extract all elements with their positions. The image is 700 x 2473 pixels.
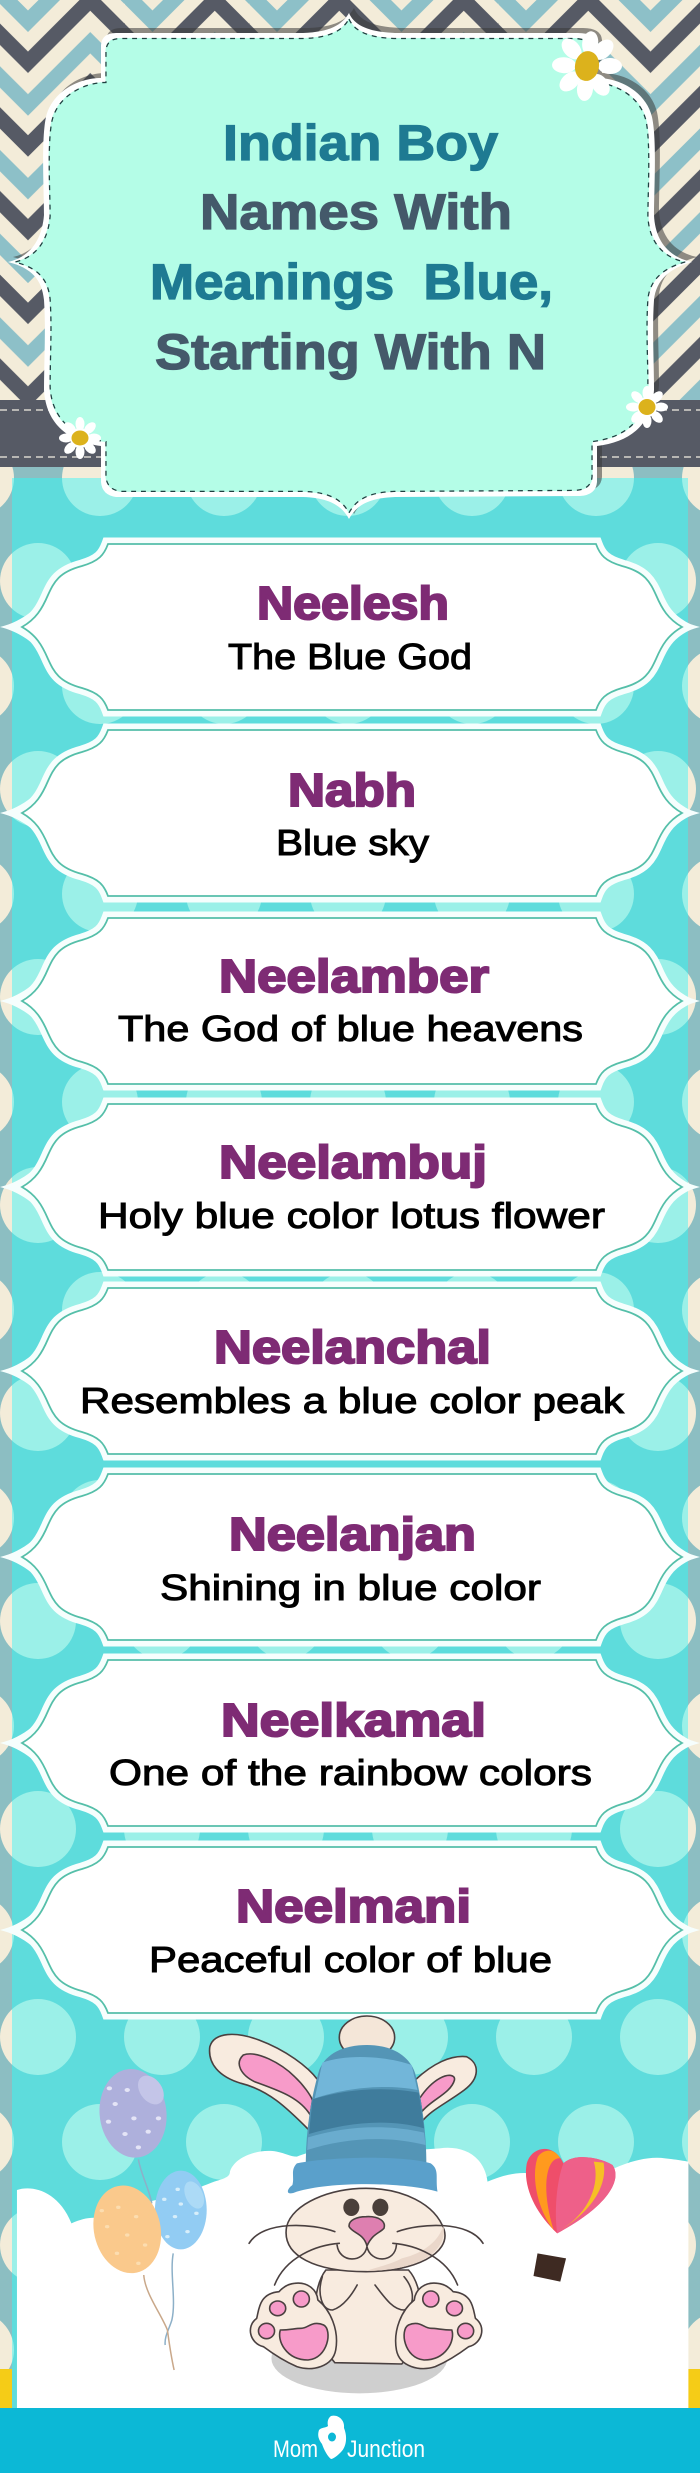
card: Neelkamal: One of the rainbow colors	[109, 1752, 592, 1793]
nose	[349, 2217, 384, 2246]
right foot	[396, 2283, 482, 2369]
purple balloon	[96, 2068, 170, 2159]
logo icon	[318, 2416, 346, 2459]
balloon strings	[138, 2159, 174, 2370]
eyes	[343, 2199, 388, 2216]
heart air balloon	[526, 2149, 615, 2282]
title: Meanings Blue,	[150, 254, 553, 310]
card: Neelkamal	[0, 1660, 700, 1826]
logo wordmark: Mom	[273, 2436, 318, 2463]
card: Neelanchal	[0, 1288, 700, 1454]
blue balloon	[155, 2171, 208, 2249]
card: Neelesh	[0, 544, 700, 710]
card: Neelmani: Peaceful color of blue	[149, 1939, 552, 1980]
icon: small daisy left	[59, 417, 101, 459]
title: Indian Boy	[223, 115, 498, 171]
orange balloon	[88, 2183, 167, 2276]
MomJunction logo	[273, 2416, 425, 2463]
card: Neelamber: The God of blue heavens	[118, 1008, 583, 1049]
card: Neelmani	[0, 1847, 700, 2013]
card: Neelkamal: Neelkamal	[221, 1694, 486, 1746]
card: Nabh: Blue sky	[276, 822, 429, 863]
card: Neelambuj: Neelambuj	[219, 1136, 487, 1188]
head	[286, 2188, 445, 2272]
card: Nabh	[0, 730, 700, 896]
ears	[210, 2034, 476, 2130]
card: Neelambuj: Holy blue color lotus flower	[98, 1195, 605, 1236]
bottom illustration	[17, 2016, 688, 2408]
arms	[320, 2277, 412, 2310]
bunny	[210, 2016, 483, 2393]
icon: small daisy right	[626, 386, 668, 428]
logo wordmark: Junction	[347, 2436, 425, 2463]
shadow	[271, 2323, 447, 2393]
card: Nabh: Nabh	[288, 764, 416, 816]
title: Starting With N	[155, 324, 546, 380]
card: Neelanchal: Neelanchal	[214, 1321, 491, 1373]
grey stitched ribbon	[0, 400, 700, 467]
card: Neelanchal: Resembles a blue color peak	[80, 1380, 625, 1421]
mouth and whiskers	[249, 2225, 483, 2285]
body	[315, 2270, 421, 2364]
card: Neelanjan: Neelanjan	[229, 1508, 476, 1560]
pompom	[339, 2016, 395, 2059]
card: Neelamber	[0, 918, 700, 1084]
card: Neelanjan	[0, 1474, 700, 1640]
basket	[533, 2253, 566, 2282]
footer band	[0, 2408, 700, 2473]
title	[150, 115, 553, 380]
title plaque	[8, 8, 697, 519]
balloons	[88, 2068, 208, 2370]
card: Neelambuj	[0, 1104, 700, 1270]
card: Neelesh: The Blue God	[228, 636, 472, 677]
card: Neelanjan: Shining in blue color	[160, 1567, 541, 1608]
card: Neelamber: Neelamber	[219, 950, 489, 1002]
card: Neelmani: Neelmani	[236, 1880, 471, 1932]
clouds	[17, 2146, 688, 2408]
left foot	[250, 2283, 337, 2369]
chevron header background	[0, 0, 700, 401]
icon: large daisy	[552, 30, 622, 102]
logo wordmark	[273, 2436, 425, 2463]
striped hat	[288, 2045, 438, 2193]
brim	[288, 2158, 438, 2193]
card: Neelesh: Neelesh	[257, 577, 449, 629]
title: Names With	[200, 184, 512, 240]
